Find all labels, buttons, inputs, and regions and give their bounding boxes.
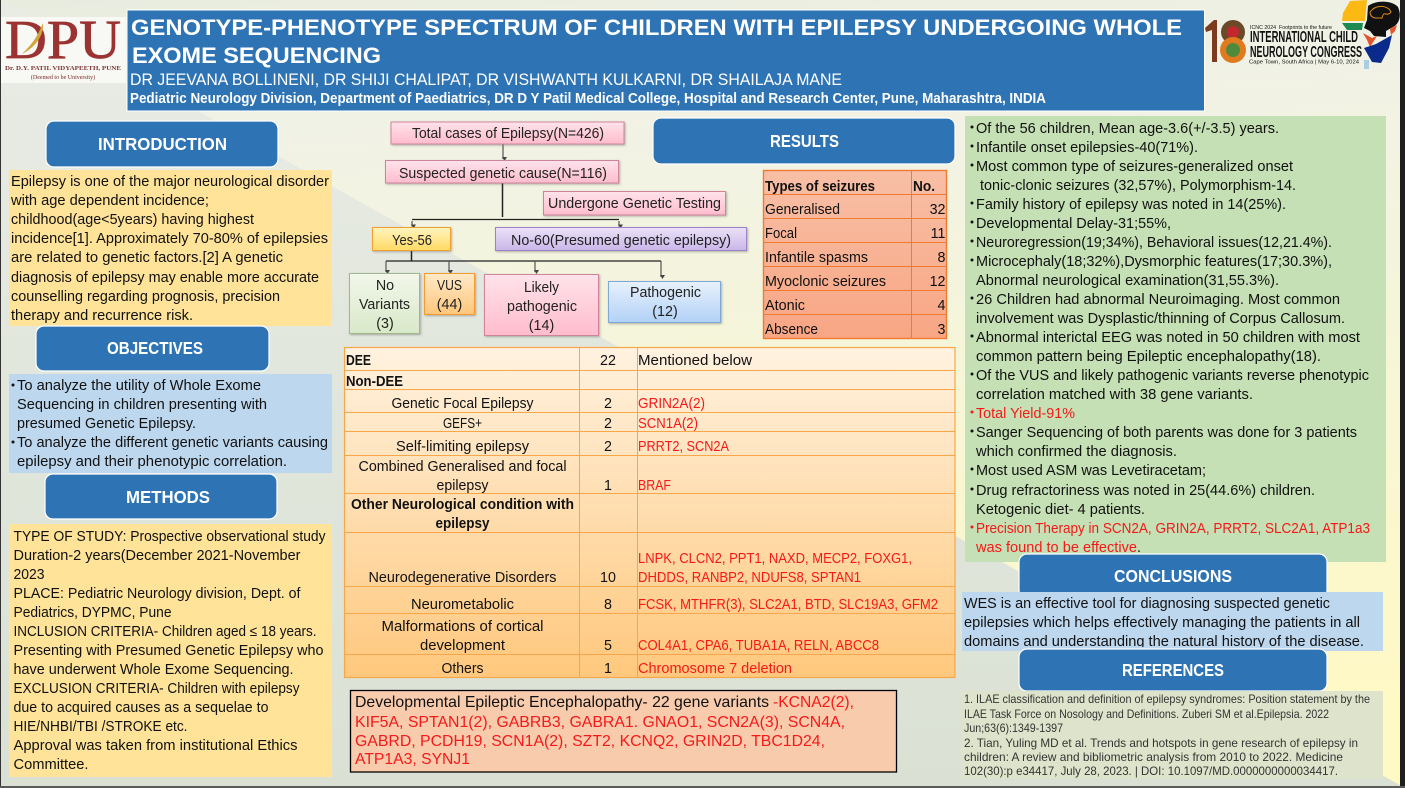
callout: DEE gene variants: GABRD, PCDH19, SCN1A(2), SZT2, KCNQ2, GRIN2D, TBC1D24, xyxy=(355,733,825,750)
panel: results findings: 26 Children had abnormal Neuroimaging. Most common xyxy=(976,292,1340,308)
panel: methods: Committee. xyxy=(14,757,88,773)
panel: methods: INCLUSION CRITERIA- Children aged ≤ 18 years. xyxy=(14,624,316,640)
table: diagnosis and gene variants: Other Neurological condition with xyxy=(351,497,574,513)
table: types of seizures: 32 xyxy=(930,202,946,218)
heading: objectives xyxy=(36,326,269,371)
table: diagnosis and gene variants: FCSK, MTHFR(3), SLC2A1, BTD, SLC19A3, GFM2 xyxy=(638,597,938,613)
table: diagnosis and gene variants: 2 xyxy=(604,396,612,412)
panel: results findings: tonic-clonic seizures (32,57%), Polymorphism-14. xyxy=(980,178,1296,194)
callout: DEE gene variants xyxy=(350,690,896,772)
table: diagnosis and gene variants: 22 xyxy=(600,353,616,369)
table: diagnosis and gene variants xyxy=(344,348,955,678)
table: diagnosis and gene variants: Non-DEE xyxy=(346,374,403,390)
table: types of seizures: 11 xyxy=(931,226,946,242)
table: diagnosis and gene variants: 1 xyxy=(604,478,612,494)
box: VUS: (44) xyxy=(437,297,462,313)
panel: methods: PLACE: Pediatric Neurology division, Dept. of xyxy=(14,586,301,602)
box: no variants: (3) xyxy=(376,316,394,332)
panel: methods: Pediatrics, DYPMC, Pune xyxy=(14,605,172,621)
panel: results findings: Abnormal interictal EEG was noted in 50 children with most xyxy=(976,330,1360,346)
panel: results findings: Most used ASM was Levetiracetam; xyxy=(976,463,1206,479)
box: pathogenic: Pathogenic xyxy=(630,285,701,301)
box: no variants: Variants xyxy=(359,297,410,313)
box: pathogenic: (12) xyxy=(652,304,678,320)
box: yes xyxy=(372,228,450,250)
table: types of seizures: Myoclonic seizures xyxy=(765,274,886,290)
heading: objectives: OBJECTIVES xyxy=(107,338,203,358)
box: likely pathogenic: Likely xyxy=(524,280,560,296)
callout: DEE gene variants: -KCNA2(2), xyxy=(773,694,854,711)
table: diagnosis and gene variants: Others xyxy=(442,661,484,677)
box: suspected genetic cause: Suspected genetic cause(N=116) xyxy=(399,166,607,182)
heading: introduction: INTRODUCTION xyxy=(98,134,227,154)
panel: results findings: Developmental Delay-31;55%, xyxy=(976,216,1171,232)
box: undergone genetic testing: Undergone Genetic Testing xyxy=(548,196,721,212)
panel: results findings: Of the VUS and likely pathogenic variants reverse phenotypic xyxy=(976,368,1369,384)
table: types of seizures: 12 xyxy=(930,274,946,290)
panel: methods: Approval was taken from institutional Ethics xyxy=(14,738,298,754)
panel: results findings: . xyxy=(1137,540,1141,556)
table: types of seizures: 8 xyxy=(938,250,946,266)
heading: results xyxy=(653,118,955,164)
panel: results findings: Drug refractoriness was noted in 25(44.6%) children. xyxy=(976,483,1315,499)
authors: DR JEEVANA BOLLINENI, DR SHIJI CHALIPAT, DR VISHWANTH KULKARNI, DR SHAILAJA MANE xyxy=(130,70,842,89)
panel: objectives: To analyze the utility of Whole Exome xyxy=(17,378,261,394)
panel: conclusions: epilepsies which helps effectively managing the patients in all xyxy=(964,615,1360,631)
callout: DEE gene variants: KIF5A, SPTAN1(2), GABRB3, GABRA1. GNAO1, SCN2A(3), SCN4A, xyxy=(355,714,845,731)
panel: references: Jun;63(6):1349-1397 xyxy=(964,721,1063,735)
table: diagnosis and gene variants: 10 xyxy=(600,570,616,586)
table: diagnosis and gene variants: GEFS+ xyxy=(443,416,482,432)
table: types of seizures: Generalised xyxy=(765,202,840,218)
panel: references: 1. ILAE classification and definition of epilepsy syndromes: Position statement by the xyxy=(964,692,1370,706)
panel: results findings: correlation matched with 38 gene variants. xyxy=(976,387,1253,403)
panel: references: children: A review and bibliometric analysis from 2010 to 2022. Medicine xyxy=(964,750,1343,764)
table: diagnosis and gene variants: epilepsy xyxy=(436,478,489,494)
panel: conclusions: domains and understanding the natural history of the disease. xyxy=(964,634,1364,650)
panel: methods: Presenting with Presumed Genetic Epilepsy who xyxy=(14,643,324,659)
table: diagnosis and gene variants: Neurodegenerative Disorders xyxy=(368,570,556,586)
panel: references: 2. Tian, Yuling MD et al. Trends and hotspots in gene research of epilepsy in xyxy=(964,736,1358,750)
box: no variants xyxy=(350,274,420,334)
panel: introduction: diagnosis of epilepsy may enable more accurate xyxy=(11,270,319,286)
table: diagnosis and gene variants: COL4A1, CPA6, TUBA1A, RELN, ABCC8 xyxy=(638,638,879,654)
table: types of seizures xyxy=(764,170,946,338)
box: pathogenic xyxy=(608,282,720,322)
panel: conclusions xyxy=(962,592,1383,651)
panel: methods: 2023 xyxy=(14,567,45,583)
table: types of seizures: Absence xyxy=(765,322,818,338)
table: diagnosis and gene variants: Neurometabolic xyxy=(411,597,514,613)
title banner xyxy=(127,10,1204,111)
heading: methods xyxy=(45,474,277,519)
panel: objectives xyxy=(9,374,332,473)
table: diagnosis and gene variants: Self-limiting epilepsy xyxy=(396,439,530,455)
table: diagnosis and gene variants: SCN1A(2) xyxy=(638,416,698,432)
panel: results findings: Microcephaly(18;32%),Dysmorphic features(17;30.3%), xyxy=(976,254,1332,270)
table: diagnosis and gene variants: Malformations of cortical xyxy=(382,619,544,635)
table: diagnosis and gene variants: DHDDS, RANBP2, NDUFS8, SPTAN1 xyxy=(638,570,861,586)
logo: congress xyxy=(1205,0,1400,69)
panel: objectives: Sequencing in children presenting with xyxy=(17,397,267,413)
flowchart xyxy=(350,122,746,336)
panel: references: 102(30):p e34417, July 28, 2023. | DOI: 10.1097/MD.0000000000034417. xyxy=(964,764,1338,778)
table: diagnosis and gene variants: 2 xyxy=(604,439,612,455)
panel: introduction: Epilepsy is one of the major neurological disorder xyxy=(11,174,329,190)
table: types of seizures: 4 xyxy=(938,298,946,314)
heading: introduction xyxy=(46,121,278,167)
table: diagnosis and gene variants: 5 xyxy=(604,638,612,654)
heading: conclusions: CONCLUSIONS xyxy=(1114,566,1232,586)
logo: DPU university: Dr. D.Y. PATIL VIDYAPEETH, PUNE xyxy=(5,65,122,72)
panel: results findings: Family history of epilepsy was noted in 14(25%). xyxy=(976,197,1286,213)
box: no: No-60(Presumed genetic epilepsy) xyxy=(511,233,731,249)
arrows: flow connectors xyxy=(386,144,661,277)
table: types of seizures: Infantile spasms xyxy=(765,250,868,266)
panel: methods: TYPE OF STUDY: Prospective observational study xyxy=(14,529,326,545)
heading: conclusions xyxy=(1019,554,1327,598)
panel: methods: due to acquired causes as a sequelae to xyxy=(14,700,269,716)
logo: congress: ICNC 2024 Footprints to the future xyxy=(1250,25,1332,31)
panel: methods xyxy=(9,524,332,777)
panel: introduction: with age dependent incidence; xyxy=(10,193,209,209)
title xyxy=(131,15,1182,68)
table: diagnosis and gene variants: development xyxy=(420,638,505,654)
table: types of seizures: Atonic xyxy=(765,298,805,314)
table: diagnosis and gene variants: 2 xyxy=(604,416,612,432)
box: total cases xyxy=(391,122,624,144)
panel: objectives: To analyze the different genetic variants causing xyxy=(17,435,328,451)
panel: introduction: therapy and recurrence risk. xyxy=(11,308,193,324)
table: types of seizures: Types of seizures xyxy=(765,179,875,195)
table: diagnosis and gene variants: GRIN2A(2) xyxy=(638,396,705,412)
panel: introduction: incidence[1]. Approximately 70-80% of epilepsies xyxy=(11,231,328,247)
panel: results findings: Infantile onset epilepsies-40(71%). xyxy=(976,140,1198,156)
panel: objectives: epilepsy and their phenotypic correlation. xyxy=(17,454,287,470)
box: likely pathogenic xyxy=(484,274,598,336)
panel: methods: HIE/NHBI/TBI /STROKE etc. xyxy=(14,719,188,735)
box: likely pathogenic: pathogenic xyxy=(507,299,577,315)
heading: methods: METHODS xyxy=(126,487,210,507)
box: yes: Yes-56 xyxy=(392,233,432,249)
box: VUS xyxy=(424,274,474,314)
panel: methods: Duration-2 years(December 2021-November xyxy=(14,548,301,564)
panel: introduction: are related to genetic factors.[2] A genetic xyxy=(11,250,283,266)
table: diagnosis and gene variants: Combined Generalised and focal xyxy=(358,459,566,475)
panel: results findings: which confirmed the diagnosis. xyxy=(975,444,1177,460)
heading: references: REFERENCES xyxy=(1122,660,1224,680)
table: diagnosis and gene variants: Mentioned below xyxy=(638,353,753,369)
table: diagnosis and gene variants: DEE xyxy=(346,353,371,369)
panel: results findings: Total Yield-91% xyxy=(976,406,1075,422)
panel: results findings: involvement was Dysplastic/thinning of Corpus Callosum. xyxy=(976,311,1345,327)
logo: congress: Cape Town, South Africa | May 6-10, 2024 xyxy=(1249,60,1360,66)
panel: results findings: was found to be effective xyxy=(975,540,1137,556)
box: undergone genetic testing xyxy=(544,192,726,215)
table: diagnosis and gene variants: BRAF xyxy=(638,478,671,494)
heading: results: RESULTS xyxy=(770,131,839,151)
panel: introduction: counselling regarding prognosis, precision xyxy=(11,289,280,305)
panel: results findings: Neuroregression(19;34%), Behavioral issues(12,21.4%). xyxy=(976,235,1332,251)
table: diagnosis and gene variants: LNPK, CLCN2, PPT1, NAXD, MECP2, FOXG1, xyxy=(638,551,912,567)
table: types of seizures: 3 xyxy=(938,322,946,338)
affiliation: Pediatric Neurology Division, Department of Paediatrics, DR D Y Patil Medical College, Hospital and Research Center, Pune, Maharashtra, INDIA xyxy=(130,91,1046,107)
panel: introduction xyxy=(9,170,332,326)
panel: references xyxy=(962,691,1383,779)
panel: results findings: Abnormal neurological examination(31,55.3%). xyxy=(976,273,1279,289)
box: total cases: Total cases of Epilepsy(N=426) xyxy=(412,126,604,142)
panel: references: ILAE Task Force on Nosology and Definitions. Zuberi SM et al.Epilepsia. 2022 xyxy=(964,707,1329,721)
panel: results findings: common pattern being Epileptic encephalopathy(18). xyxy=(976,349,1321,365)
box: likely pathogenic: (14) xyxy=(529,318,554,334)
callout: DEE gene variants: Developmental Epileptic Encephalopathy- 22 gene variants xyxy=(355,694,769,711)
panel: methods: have underwent Whole Exome Sequencing. xyxy=(14,662,294,678)
table: types of seizures: No. xyxy=(913,179,935,195)
logo: DPU university: (Deemed to be University) xyxy=(31,74,95,81)
panel: introduction: childhood(age<5years) having highest xyxy=(11,212,254,228)
panel: results findings: Precision Therapy in SCN2A, GRIN2A, PRRT2, SLC2A1, ATP1a3 xyxy=(976,521,1370,537)
logo: DPU university: DPU xyxy=(5,9,121,70)
table: diagnosis and gene variants: 1 xyxy=(604,661,612,677)
title: GENOTYPE-PHENOTYPE SPECTRUM OF CHILDREN WITH EPILEPSY UNDERGOING WHOLE xyxy=(131,15,1182,40)
panel: conclusions: WES is an effective tool for diagnosing suspected genetic xyxy=(964,596,1330,612)
panel: results findings: Of the 56 children, Mean age-3.6(+/-3.5) years. xyxy=(976,121,1279,137)
table: diagnosis and gene variants: epilepsy xyxy=(436,516,490,532)
table: diagnosis and gene variants: Chromosome 7 deletion xyxy=(638,661,792,677)
box: suspected genetic cause xyxy=(386,160,618,183)
heading: references xyxy=(1019,649,1327,691)
panel: results findings: Sanger Sequencing of both parents was done for 3 patients xyxy=(976,425,1357,441)
panel: results findings xyxy=(965,116,1386,562)
box: VUS: VUS xyxy=(437,278,462,294)
panel: objectives: presumed Genetic Epilepsy. xyxy=(17,416,196,432)
table: diagnosis and gene variants: Genetic Focal Epilepsy xyxy=(392,396,534,412)
box: no xyxy=(496,228,746,250)
panel: results findings: Most common type of seizures-generalized onset xyxy=(976,159,1293,175)
panel: results findings: Ketogenic diet- 4 patients. xyxy=(976,502,1145,518)
table: diagnosis and gene variants: PRRT2, SCN2A xyxy=(638,439,729,455)
table: types of seizures: Focal xyxy=(765,226,797,242)
table: diagnosis and gene variants: 8 xyxy=(604,597,612,613)
panel: methods: EXCLUSION CRITERIA- Children with epilepsy xyxy=(14,681,300,697)
title: EXOME SEQUENCING xyxy=(132,43,381,68)
box: no variants: No xyxy=(376,278,394,294)
callout: DEE gene variants: ATP1A3, SYNJ1 xyxy=(355,751,470,768)
